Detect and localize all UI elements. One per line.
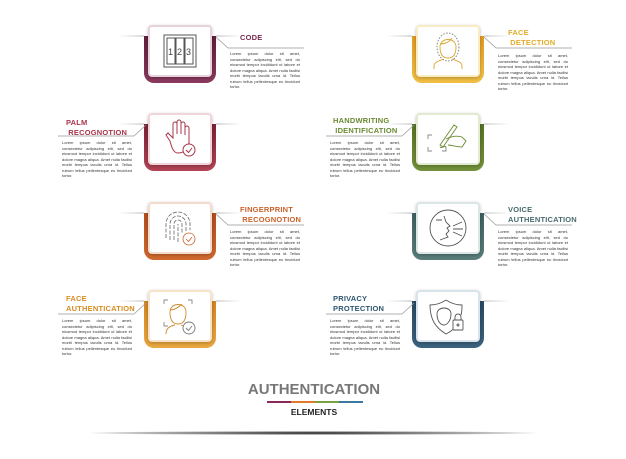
heading: authentication: AUTHENTICATION xyxy=(248,381,380,398)
icon: handwriting xyxy=(428,124,466,152)
card: face authentication xyxy=(124,289,236,348)
title: palm xyxy=(66,118,127,137)
card: palm xyxy=(124,112,236,171)
title: face detection: FACE xyxy=(508,28,529,37)
text: privacy: Lorem ipsum dolor sit amet, consectetur adipiscing elit, sed do eiusmod tempor incididunt ut labore et dolore magna aliqua. Amet nulla facilisi morbi tempus iaculis urna id. Tellus rutrum tellus pellentesque eu tincidunt tortor. xyxy=(330,318,400,356)
icon: palm xyxy=(165,120,196,156)
title: face detection xyxy=(508,28,555,47)
title: privacy xyxy=(333,294,384,313)
title: voice: VOICE xyxy=(508,205,532,214)
title: fingerprint: FINGERPRINT xyxy=(240,205,293,214)
icon: keypad: 1 xyxy=(168,47,173,57)
title: handwriting xyxy=(333,116,398,135)
title: face detection: DETECTION xyxy=(510,38,555,47)
title: voice xyxy=(508,205,577,224)
card: fingerprint xyxy=(124,201,236,260)
shadow xyxy=(90,431,536,435)
color bar xyxy=(267,401,363,403)
title: privacy: PROTECTION xyxy=(333,304,384,313)
title: face authentication: AUTHENTICATION xyxy=(66,304,135,313)
title: fingerprint xyxy=(240,205,301,224)
text: fingerprint: Lorem ipsum dolor sit amet, consectetur adipiscing elit, sed do eiusmod tempor incididunt ut labore et dolore magna aliqua. Amet nulla facilisi morbi tempus iaculis urna id. Tellus rutrum tellus pellentesque eu tincidunt tortor. xyxy=(230,229,300,267)
card: privacy xyxy=(392,289,504,348)
card: code xyxy=(124,24,236,83)
title: privacy: PRIVACY xyxy=(333,294,367,303)
text: face detection: Lorem ipsum dolor sit amet, consectetur adipiscing elit, sed do eiusmod tempor incididunt ut labore et dolore magna aliqua. Amet nulla facilisi morbi tempus iaculis urna id. Tellus rutrum tellus pellentesque eu tincidunt tortor. xyxy=(498,53,568,91)
title: voice: AUTHENTICATION xyxy=(508,215,577,224)
title: code: CODE xyxy=(240,33,262,42)
text: palm: Lorem ipsum dolor sit amet, consectetur adipiscing elit, sed do eiusmod tempor incididunt ut labore et dolore magna aliqua. Amet nulla facilisi morbi tempus iaculis urna id. Tellus rutrum tellus pellentesque eu tincidunt tortor. xyxy=(62,140,132,178)
title: face authentication: FACE xyxy=(66,294,87,303)
title: palm: PALM xyxy=(66,118,88,127)
title: face authentication xyxy=(66,294,135,313)
icon: fingerprint xyxy=(166,212,196,246)
text: code: Lorem ipsum dolor sit amet, consectetur adipiscing elit, sed do eiusmod tempor incididunt ut labore et dolore magna aliqua. Amet nulla facilisi morbi tempus iaculis urna id. Tellus rutrum tellus pellentesque eu tincidunt tortor. xyxy=(230,51,300,89)
icon: keypad: 2 xyxy=(177,47,182,57)
title: fingerprint: RECOGNOTION xyxy=(242,215,301,224)
icon: voice xyxy=(430,210,466,246)
card: face detection xyxy=(392,24,504,83)
icon: keypad xyxy=(164,34,196,68)
text: face authentication: Lorem ipsum dolor sit amet, consectetur adipiscing elit, sed do eiusmod tempor incididunt ut labore et dolore magna aliqua. Amet nulla facilisi morbi tempus iaculis urna id. Tellus rutrum tellus pellentesque eu tincidunt tortor. xyxy=(62,318,132,356)
subheading: elements: ELEMENTS xyxy=(291,407,337,417)
title: handwriting: IDENTIFICATION xyxy=(335,126,398,135)
text: handwriting: Lorem ipsum dolor sit amet, consectetur adipiscing elit, sed do eiusmod tempor incididunt ut labore et dolore magna aliqua. Amet nulla facilisi morbi tempus iaculis urna id. Tellus rutrum tellus pellentesque eu tincidunt tortor. xyxy=(330,140,400,178)
text: voice: Lorem ipsum dolor sit amet, consectetur adipiscing elit, sed do eiusmod tempor incididunt ut labore et dolore magna aliqua. Amet nulla facilisi morbi tempus iaculis urna id. Tellus rutrum tellus pellentesque eu tincidunt tortor. xyxy=(498,229,568,267)
title: palm: RECOGNOTION xyxy=(68,128,127,137)
card: voice xyxy=(392,201,504,260)
icon: shield xyxy=(430,300,464,334)
icon: face detection xyxy=(434,32,462,69)
icon: keypad: 3 xyxy=(186,47,191,57)
title: handwriting: HANDWRITING xyxy=(333,116,389,125)
icon: face auth xyxy=(164,300,196,334)
card: handwriting xyxy=(392,112,504,171)
